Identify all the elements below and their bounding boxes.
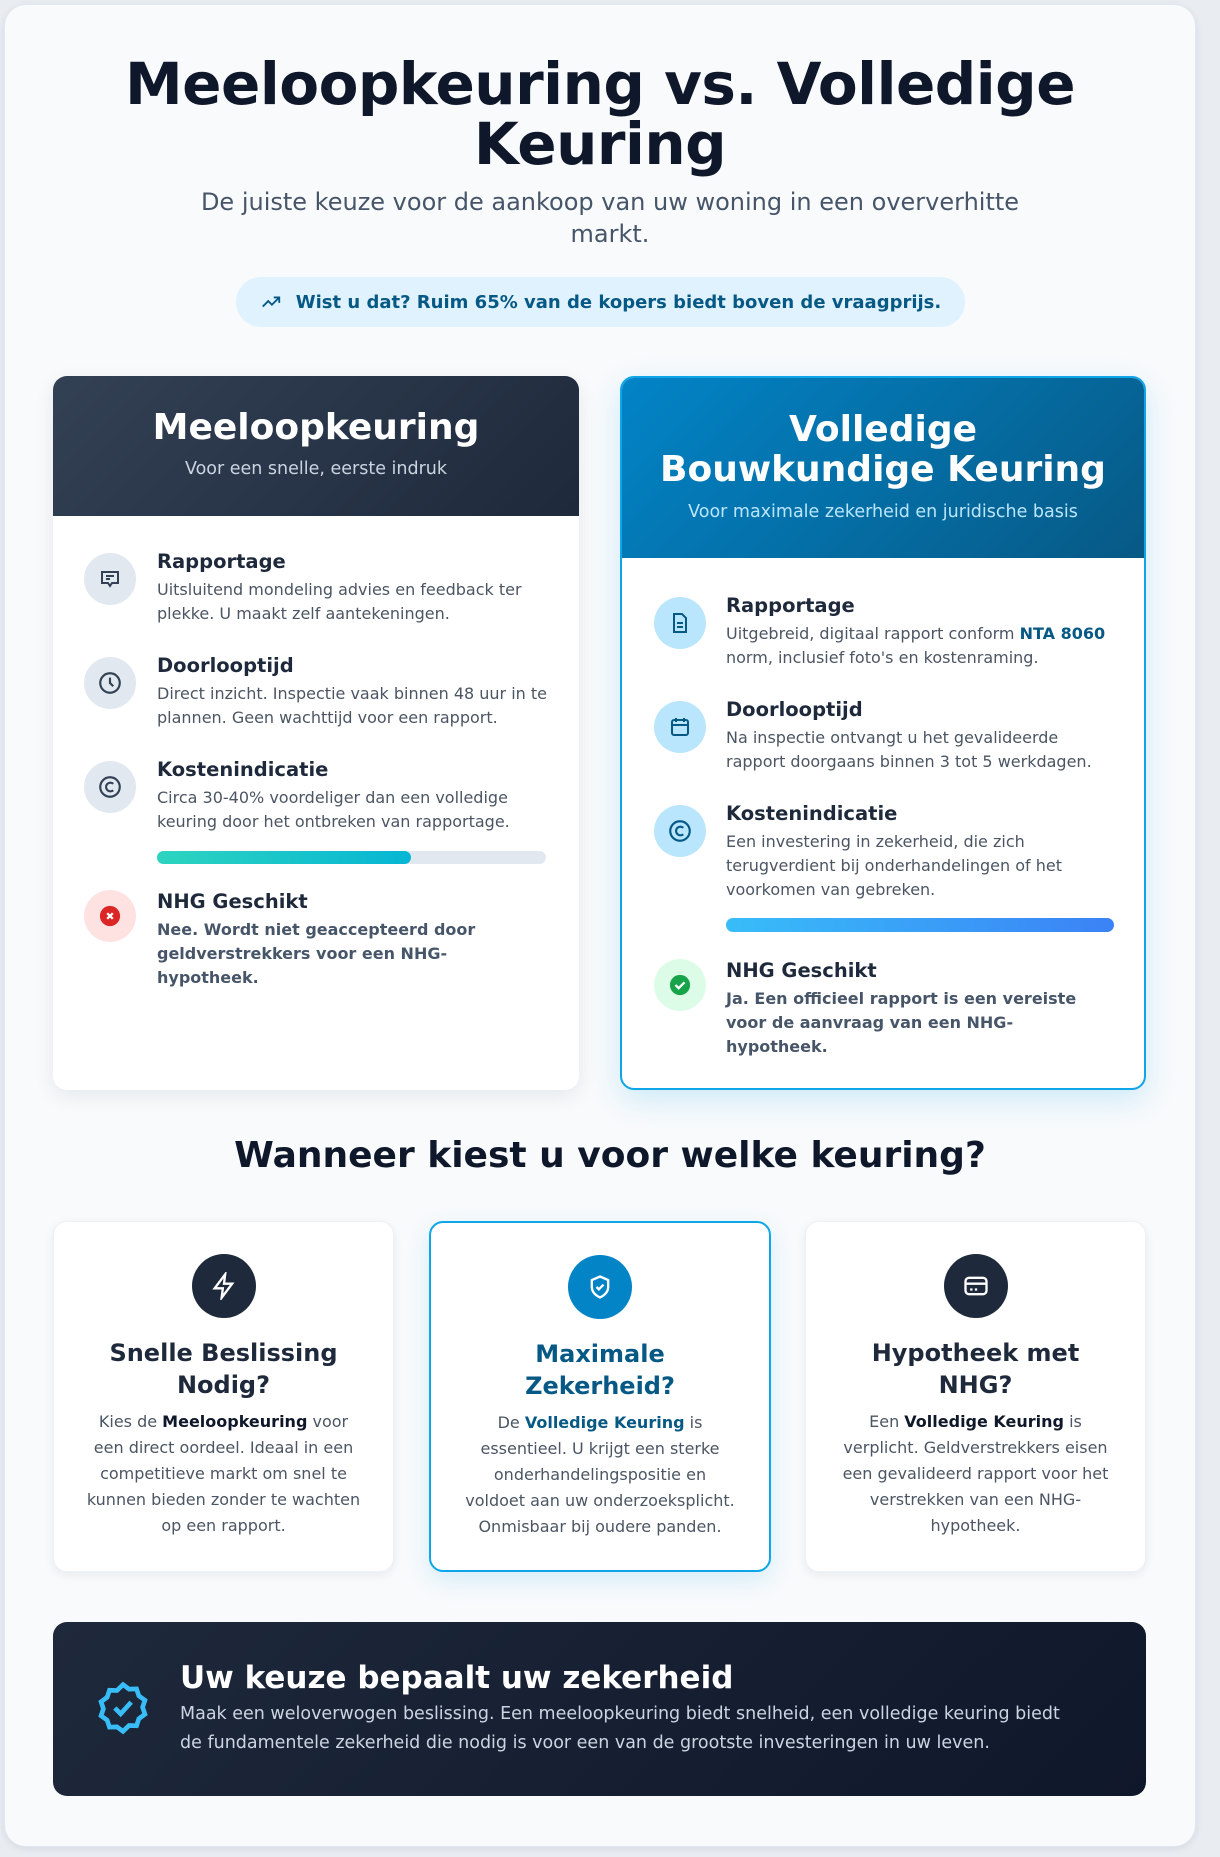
icon: trending up: [262, 296, 280, 308]
header: volledige: Volledige: [789, 409, 977, 450]
banner text: Maak een weloverwogen beslissing. Een meeloopkeuring biedt snelheid, een volledige keuring biedt de fundamentele zekerheid die nodig is voor een van de grootste investeringen in uw leven.: [180, 1704, 1060, 1753]
item: nhg no: Nee. Wordt niet geaccepteerd door geldverstrekkers voor een NHG-hypotheek.: [157, 920, 475, 987]
icon: shield: [568, 1255, 632, 1319]
item: doorlooptijd: Doorlooptijd: [157, 654, 294, 677]
item: rapportage: Uitgebreid, digitaal rapport conform NTA 8060 norm, inclusief foto's en kostenraming.: [726, 624, 1105, 667]
title: Keuring: [474, 110, 726, 178]
item: kostenindicatie: Circa 30-40% voordeliger dan een volledige keuring door het ontbreken van rapportage.: [157, 788, 510, 831]
banner title: Uw keuze bepaalt uw zekerheid: [180, 1660, 733, 1696]
bar: cost full: [726, 918, 1114, 932]
header: meeloopkeuring: Meeloopkeuring: [153, 407, 479, 448]
banner: conclusion: [53, 1622, 1146, 1796]
item: rapportage: [84, 550, 522, 623]
item: nhg yes: [654, 959, 1076, 1056]
header: volledige: Voor maximale zekerheid en juridische basis: [688, 502, 1078, 522]
subtitle: markt.: [571, 220, 649, 248]
card: maximale zekerheid: Zekerheid?: [525, 1372, 675, 1400]
item: nhg yes: NHG Geschikt: [726, 959, 877, 982]
item: nhg no: [84, 890, 476, 987]
item: doorlooptijd: [654, 698, 1092, 771]
item: kostenindicatie: [84, 758, 546, 864]
item: kostenindicatie: [654, 802, 1114, 932]
item: kostenindicatie: Kostenindicatie: [726, 802, 897, 825]
bar: cost: [157, 851, 546, 864]
card: snelle beslissing: Kies de Meeloopkeuring voor een direct oordeel. Ideaal in een competitieve markt om snel te kunnen bieden zonder te wachten op een rapport.: [87, 1412, 360, 1535]
callout pill: [236, 277, 965, 327]
item: rapportage: Rapportage: [157, 550, 286, 573]
panel: meeloopkeuring: [53, 376, 579, 1090]
card: hypotheek nhg: Hypotheek met: [872, 1339, 1079, 1367]
item: doorlooptijd: Na inspectie ontvangt u het gevalideerde rapport doorgaans binnen 3 tot 5 werkdagen.: [726, 728, 1092, 771]
header: meeloopkeuring: Voor een snelle, eerste indruk: [185, 459, 447, 479]
item: nhg yes: Ja. Een officieel rapport is een vereiste voor de aanvraag van een NHG-hypotheek.: [726, 989, 1076, 1056]
item: rapportage: Uitsluitend mondeling advies en feedback ter plekke. U maakt zelf aantekeningen.: [157, 580, 522, 623]
icon: lightning: [192, 1254, 256, 1318]
card: snelle beslissing: Snelle Beslissing: [109, 1339, 338, 1367]
item: doorlooptijd: Doorlooptijd: [726, 698, 863, 721]
header: volledige: [622, 378, 1144, 558]
card: snelle beslissing: [53, 1221, 394, 1572]
title: Meeloopkeuring vs. Volledige: [125, 50, 1075, 118]
header: meeloopkeuring: [53, 376, 579, 516]
section heading: Wanneer kiest u voor welke keuring?: [234, 1135, 986, 1176]
card: maximale zekerheid: De Volledige Keuring is essentieel. U krijgt een sterke onderhandelingspositie en voldoet aan uw onderzoeksplicht. Onmisbaar bij oudere panden.: [465, 1413, 735, 1536]
header: volledige: Bouwkundige Keuring: [660, 449, 1106, 490]
item: kostenindicatie: Kostenindicatie: [157, 758, 328, 781]
item: rapportage: Rapportage: [726, 594, 855, 617]
card: hypotheek nhg: [805, 1221, 1146, 1572]
subtitle: [201, 188, 1019, 248]
callout pill: Wist u dat? Ruim 65% van de kopers biedt boven de vraagprijs.: [296, 292, 941, 312]
item: doorlooptijd: [84, 654, 547, 727]
item: rapportage: [654, 594, 1105, 667]
panel: volledige keuring: [620, 376, 1146, 1090]
card: hypotheek nhg: NHG?: [939, 1371, 1012, 1399]
icon: card: [944, 1254, 1008, 1318]
item: nhg no: NHG Geschikt: [157, 890, 308, 913]
subtitle: De juiste keuze voor de aankoop van uw woning in een oververhitte: [201, 188, 1019, 216]
card: hypotheek nhg: Een Volledige Keuring is verplicht. Geldverstrekkers eisen een gevalideerd rapport voor het verstrekken van een NHG-hypotheek.: [843, 1412, 1108, 1535]
item: kostenindicatie: Een investering in zekerheid, die zich terugverdient bij onderhandelingen of het voorkomen van gebreken.: [726, 832, 1062, 899]
icon: badge check: [98, 1682, 148, 1734]
card: maximale zekerheid: Maximale: [535, 1340, 665, 1368]
title: [125, 50, 1075, 178]
card: snelle beslissing: Nodig?: [177, 1371, 270, 1399]
card: maximale zekerheid: [429, 1221, 771, 1572]
item: doorlooptijd: Direct inzicht. Inspectie vaak binnen 48 uur in te plannen. Geen wachttijd voor een rapport.: [157, 684, 547, 727]
